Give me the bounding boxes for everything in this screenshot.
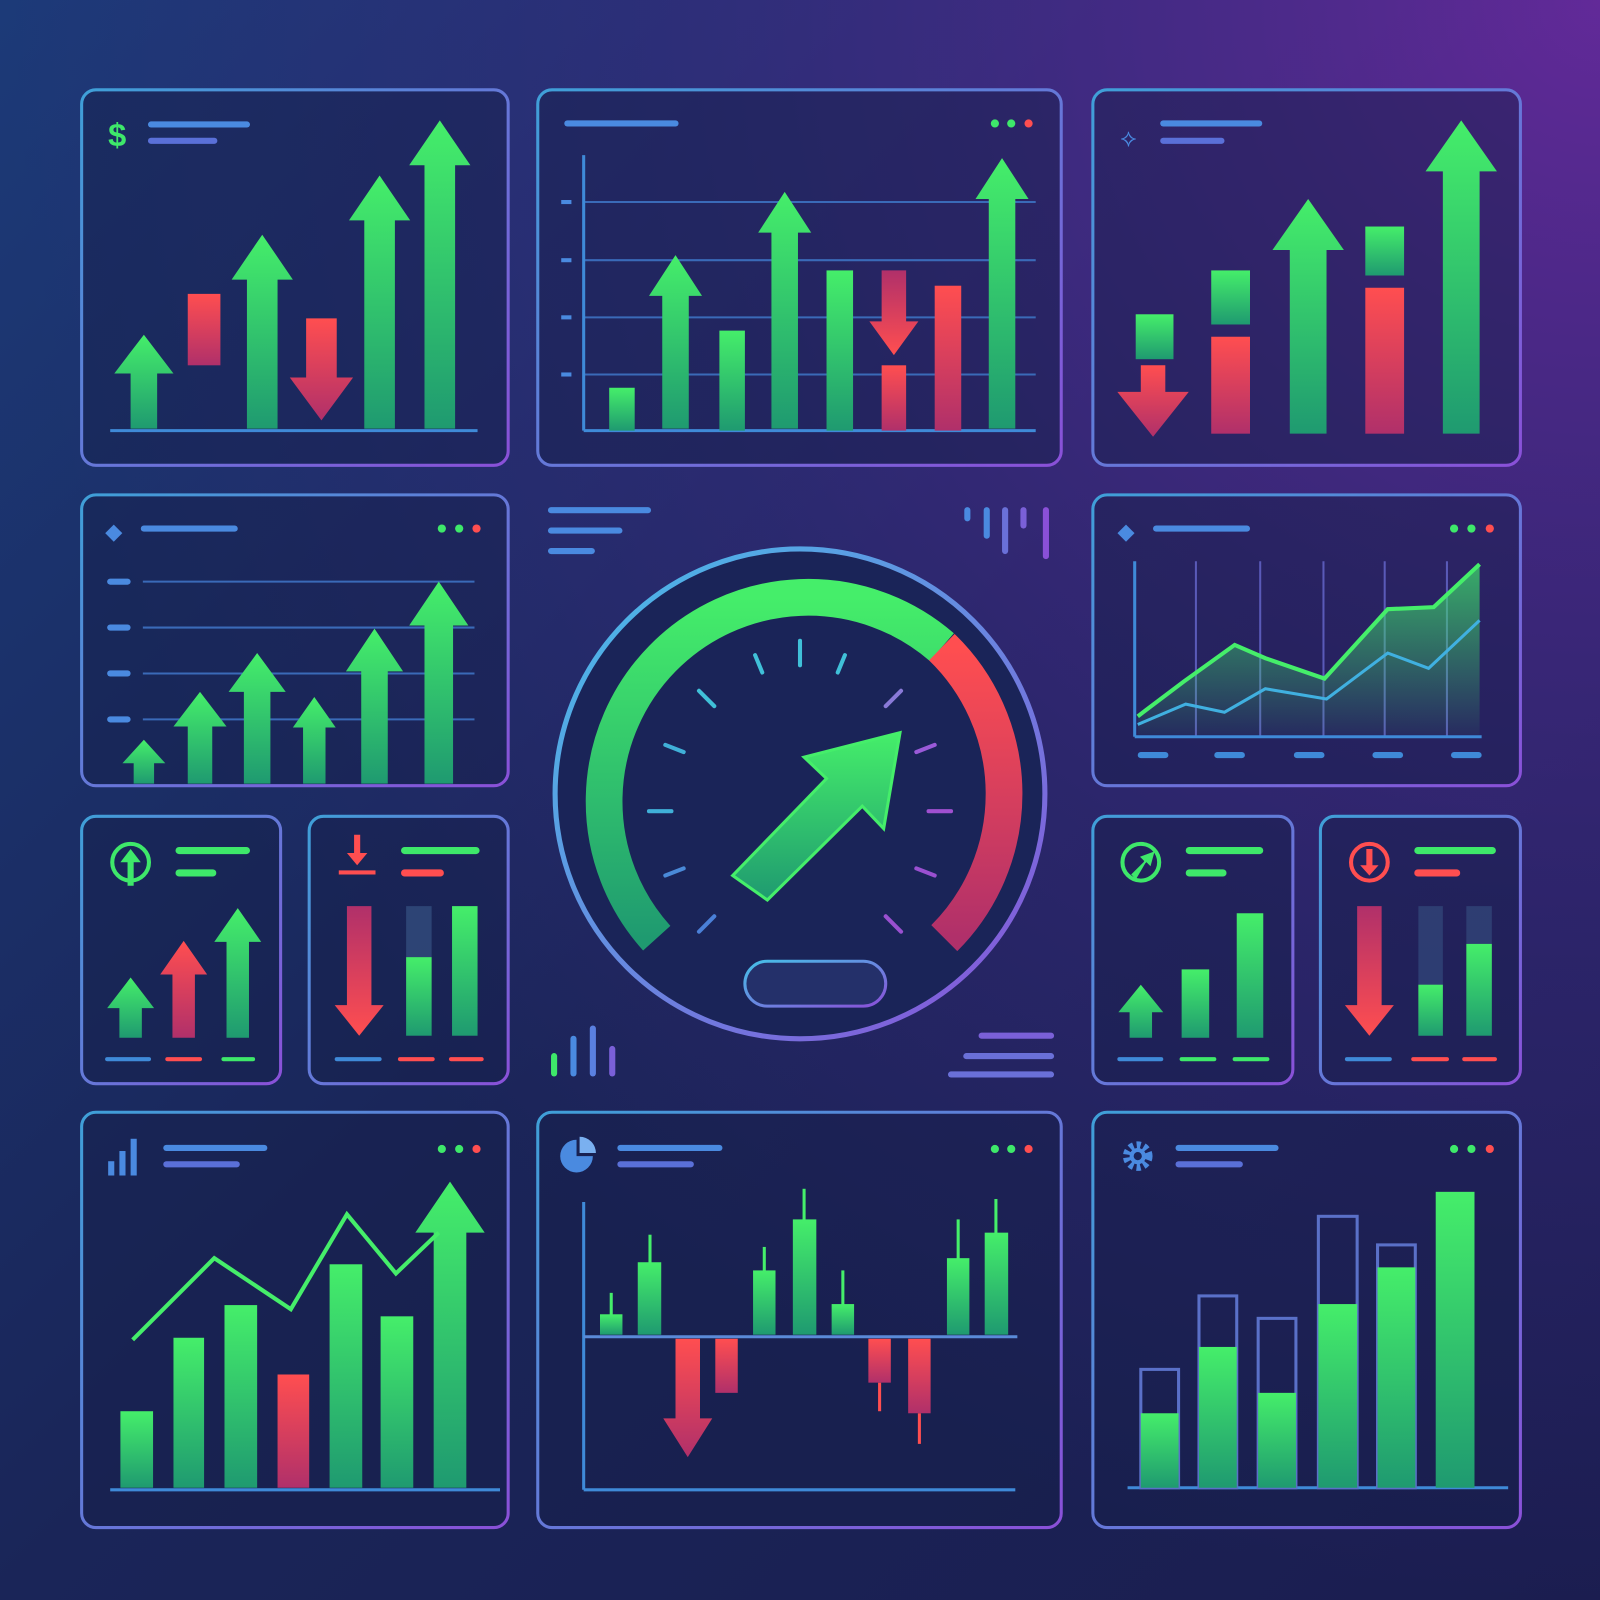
panel: small up bars right bbox=[1093, 816, 1293, 1084]
decor: gauge accents bbox=[551, 510, 1051, 1074]
panel: top-left bar arrows bbox=[82, 90, 508, 465]
panel: middle-right area chart: ◆ bbox=[1117, 519, 1135, 545]
panel: top-middle bar chart bbox=[538, 90, 1061, 465]
panel: middle-left arrows with grid bbox=[82, 495, 508, 786]
panel: small down arrow bbox=[309, 816, 508, 1084]
panel: bottom-left bars with line bbox=[82, 1112, 508, 1528]
panel: bottom-right stacked bars bbox=[1093, 1112, 1520, 1528]
gauge bbox=[555, 549, 1045, 1039]
panel: top-right mixed bars: ⟡ bbox=[1120, 123, 1137, 152]
panel: middle-right area chart bbox=[1093, 495, 1520, 786]
icon: dollar: $ bbox=[108, 116, 126, 153]
needle arrow bbox=[733, 733, 900, 900]
icon: gear bbox=[1127, 1145, 1149, 1167]
panel: middle-left arrows with grid: ◆ bbox=[105, 519, 123, 545]
panel: small down right bbox=[1320, 816, 1520, 1084]
panel: top-right mixed bars bbox=[1093, 90, 1520, 465]
panel: small up arrows bbox=[82, 816, 281, 1084]
panel: bottom-middle candlesticks bbox=[538, 1112, 1061, 1528]
